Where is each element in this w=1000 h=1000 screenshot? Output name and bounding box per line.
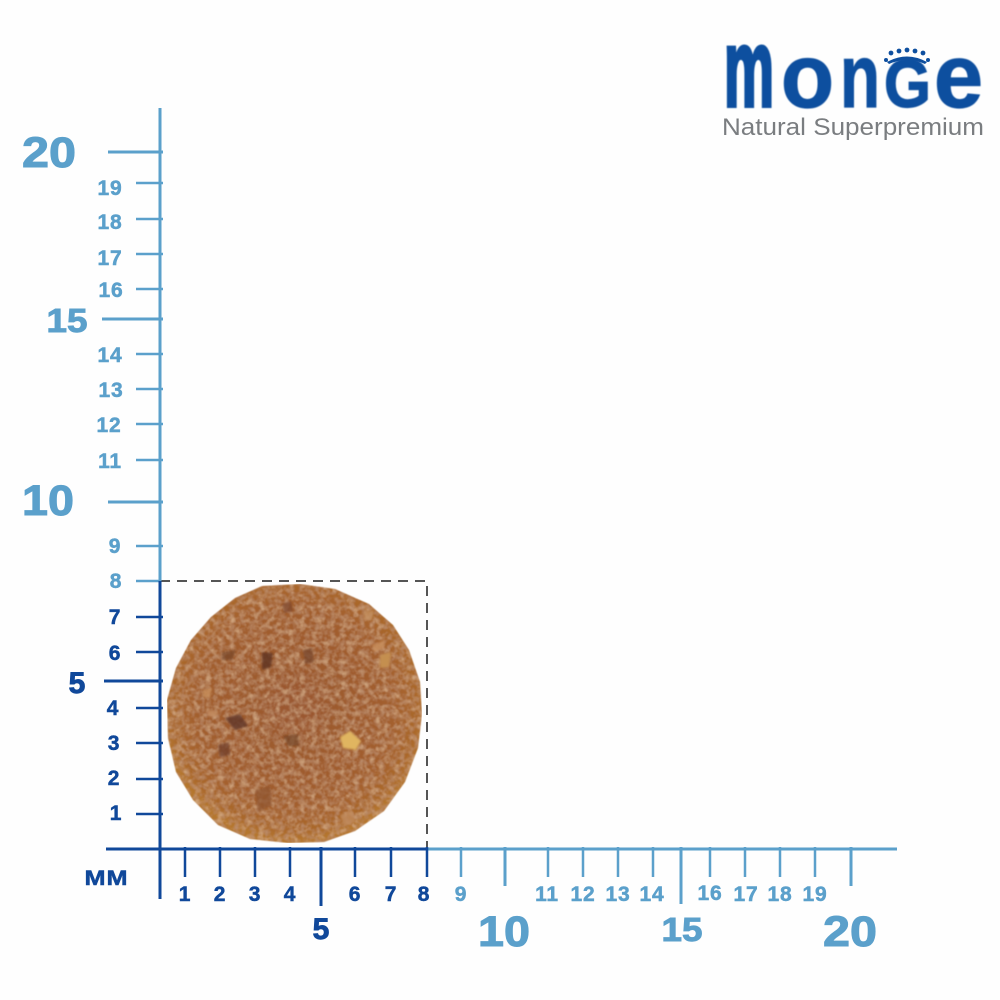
horizontal axis labels: 16	[698, 882, 722, 905]
logo wordmark: m	[724, 7, 774, 130]
logo wordmark: G	[884, 46, 931, 122]
horizontal axis labels: 13	[606, 883, 630, 906]
logo	[722, 7, 984, 141]
vertical axis labels: 8	[110, 570, 122, 593]
vertical axis labels: 2	[108, 767, 120, 790]
vertical axis	[102, 108, 163, 899]
horizontal axis labels: 6	[349, 883, 361, 906]
vertical axis dark segment	[104, 581, 163, 899]
logo wordmark	[724, 7, 983, 130]
vertical axis labels: 9	[109, 535, 121, 558]
horizontal axis labels	[179, 882, 877, 956]
horizontal axis labels: 3	[249, 883, 261, 906]
vertical axis labels: 15	[46, 302, 88, 339]
vertical axis labels	[22, 129, 123, 825]
horizontal axis labels: 20	[823, 908, 877, 956]
vertical axis labels: 17	[98, 247, 122, 270]
vertical axis labels: 12	[97, 414, 121, 437]
vertical axis labels: 4	[107, 697, 119, 720]
horizontal axis labels: 7	[385, 883, 397, 906]
vertical axis labels: 18	[98, 211, 122, 234]
horizontal axis labels: 8	[418, 883, 430, 906]
vertical axis labels: 19	[98, 177, 122, 200]
vertical axis light segment	[102, 108, 163, 582]
vertical axis labels: 13	[99, 379, 123, 402]
horizontal axis	[106, 847, 897, 906]
horizontal axis labels: 18	[768, 883, 792, 906]
logo tagline: Natural Superpremium	[722, 114, 984, 141]
logo crown	[884, 48, 930, 64]
horizontal axis labels: 15	[662, 911, 702, 948]
horizontal axis labels: 14	[640, 883, 664, 906]
vertical axis labels: 11	[98, 450, 122, 473]
horizontal axis labels: 11	[535, 883, 559, 906]
kibble photo	[167, 584, 422, 843]
horizontal axis dark segment	[106, 847, 427, 906]
vertical axis labels: 6	[109, 642, 121, 665]
horizontal axis labels: 2	[214, 883, 226, 906]
vertical axis labels: 16	[99, 279, 123, 302]
dashed size box	[160, 581, 427, 849]
horizontal axis labels: 5	[313, 913, 329, 946]
logo wordmark: n	[840, 27, 880, 127]
vertical axis labels: 20	[22, 129, 76, 177]
logo wordmark: o	[781, 27, 834, 127]
kibble dark and light specks	[203, 601, 391, 826]
logo wordmark: e	[934, 27, 983, 127]
horizontal axis labels: 4	[284, 883, 296, 906]
horizontal axis labels: 9	[455, 883, 467, 906]
horizontal axis light segment	[427, 847, 897, 904]
horizontal axis labels: 1	[179, 883, 191, 906]
vertical axis labels: 14	[98, 344, 122, 367]
unit label MM: MM	[84, 867, 128, 890]
vertical axis labels: 1	[110, 802, 122, 825]
horizontal axis labels: 19	[803, 883, 827, 906]
vertical axis labels: 5	[69, 667, 85, 700]
horizontal axis labels: 10	[478, 908, 530, 956]
vertical axis labels: 3	[108, 732, 120, 755]
vertical axis labels: 10	[22, 477, 74, 525]
horizontal axis labels: 12	[571, 883, 595, 906]
vertical axis labels: 7	[109, 606, 121, 629]
horizontal axis labels: 17	[734, 883, 758, 906]
